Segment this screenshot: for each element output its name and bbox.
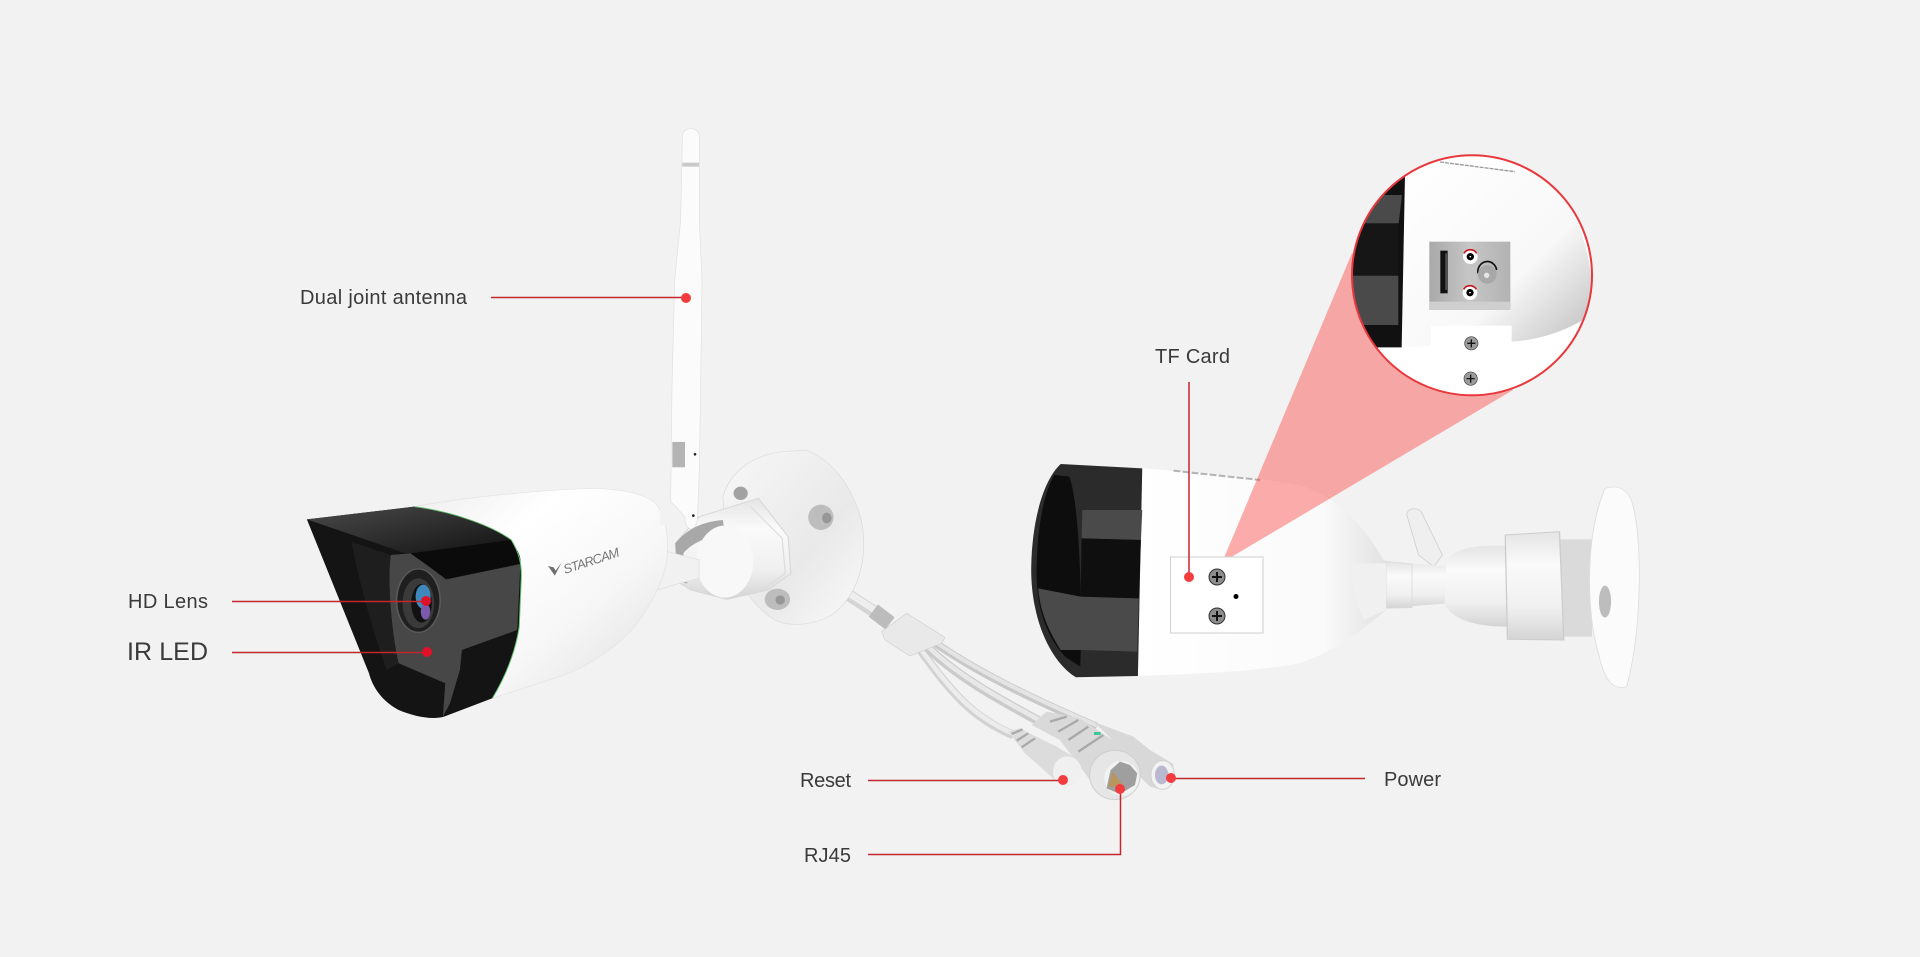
camera body xyxy=(1138,468,1386,676)
label: RJ45: RJ45 xyxy=(804,845,851,867)
label: TF card xyxy=(1155,346,1230,582)
gloss band xyxy=(410,540,521,579)
inset bracket xyxy=(1454,326,1512,344)
inset hood xyxy=(1350,170,1405,347)
label: reset: Reset xyxy=(800,770,851,792)
RJ45 connector xyxy=(1032,712,1140,800)
label: power: Power xyxy=(1384,769,1441,791)
label: RJ45 xyxy=(804,784,1125,867)
label: IR LED: IR LED xyxy=(127,638,208,666)
cable with connectors xyxy=(833,583,1174,800)
label: HD lens: HD Lens xyxy=(128,591,208,613)
ball joint xyxy=(1445,546,1507,627)
brand text on top edge xyxy=(1173,471,1260,480)
panel screw top xyxy=(1209,569,1225,585)
right camera xyxy=(1031,464,1639,688)
camera body xyxy=(414,488,668,698)
label: IR LED xyxy=(127,638,432,666)
antenna xyxy=(660,129,702,529)
label: dual joint antenna xyxy=(300,287,691,309)
wall mount disk xyxy=(723,450,864,624)
front hood xyxy=(1031,464,1142,677)
label: HD lens xyxy=(128,591,431,613)
panel screw bottom xyxy=(1209,608,1225,624)
access panel xyxy=(1170,557,1263,633)
threaded collar xyxy=(1505,532,1564,640)
mount plate xyxy=(1590,487,1639,688)
screw post top xyxy=(1463,249,1478,264)
label: reset xyxy=(800,770,1068,792)
zoom cone xyxy=(1221,253,1513,565)
reset connector xyxy=(1008,728,1082,787)
tf card slot xyxy=(1440,251,1448,293)
mount neck xyxy=(1384,561,1447,608)
faceplate xyxy=(389,553,520,717)
hood bands xyxy=(1038,510,1142,652)
folded antenna xyxy=(1407,509,1442,567)
front hood xyxy=(307,507,521,718)
label: power xyxy=(1166,769,1441,791)
joint xyxy=(658,498,791,599)
hood inner xyxy=(1037,475,1081,667)
magnified inset circle xyxy=(1351,154,1593,396)
hood top xyxy=(307,507,511,555)
brand logo mark xyxy=(548,563,562,576)
label: dual joint antenna: Dual joint antenna xyxy=(300,287,468,309)
inset port recess xyxy=(1429,242,1510,310)
reset button xyxy=(1478,262,1497,284)
screw post bottom xyxy=(1463,285,1477,300)
infographic canvas xyxy=(129,128,1640,862)
power connector xyxy=(1093,722,1173,789)
green rim xyxy=(414,507,521,698)
label: TF card: TF Card xyxy=(1155,346,1230,368)
lens xyxy=(397,569,440,632)
inset logo trace xyxy=(1440,162,1515,172)
inset body xyxy=(1473,222,1591,342)
inner recess stripes xyxy=(351,542,399,670)
left camera xyxy=(307,450,864,718)
brand name: STARCAM xyxy=(561,545,621,577)
rear tube xyxy=(1559,539,1592,637)
